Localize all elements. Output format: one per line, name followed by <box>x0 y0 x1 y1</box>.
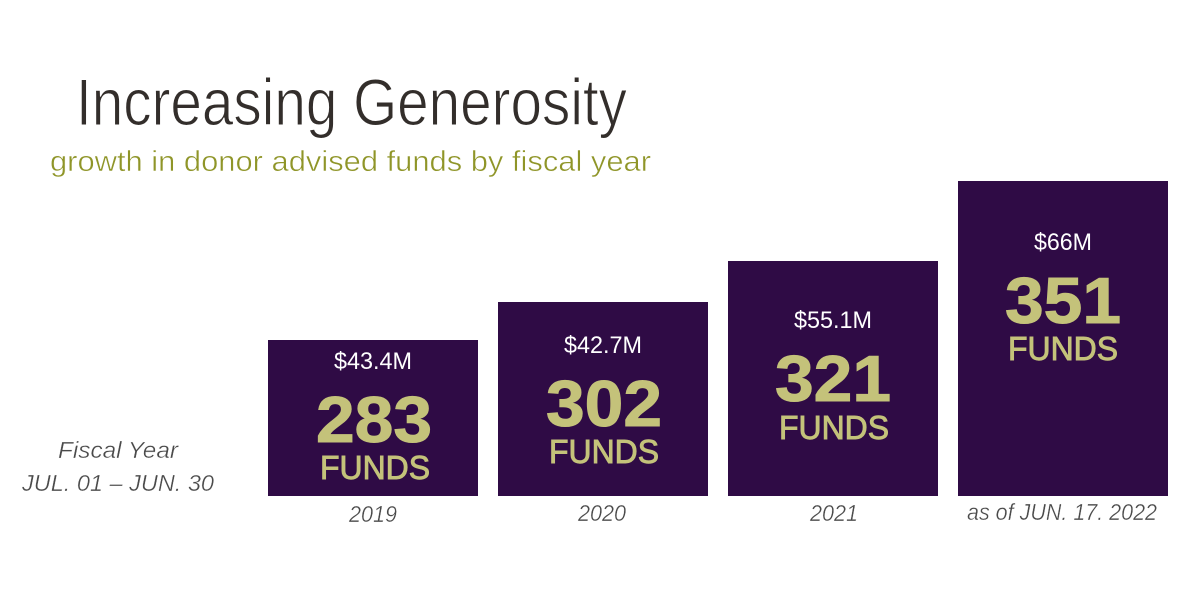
label: 2019: 2019 <box>348 501 397 527</box>
bar: 2019: 283 <box>316 383 432 456</box>
bar: 2021: FUNDS <box>779 409 889 446</box>
label: 2020: 2020 <box>577 500 626 526</box>
bar: 2020: 302 <box>546 367 662 440</box>
fiscal year note <box>21 437 214 496</box>
label: 2022: as of JUN. 17. 2022 <box>967 499 1157 525</box>
bar: 2020 <box>498 302 708 496</box>
bar: 2021: 321 <box>775 342 891 415</box>
fiscal year note: Fiscal Year <box>58 437 179 463</box>
fiscal year note: JUL. 01 – JUN. 30 <box>21 470 214 496</box>
bar: 2022 <box>958 181 1168 496</box>
title: Increasing Generosity <box>76 65 627 139</box>
bar: 2021: $55.1M <box>794 307 872 334</box>
bar: 2022: FUNDS <box>1008 330 1118 367</box>
label: 2021: 2021 <box>809 500 858 526</box>
bar: 2019: $43.4M <box>334 348 412 375</box>
bar: 2022: 351 <box>1005 264 1121 337</box>
bar: 2020: $42.7M <box>564 332 642 359</box>
bar: 2020: FUNDS <box>549 433 659 470</box>
bar: 2019 <box>268 340 478 496</box>
bar: 2021 <box>728 261 938 496</box>
bar: 2019: FUNDS <box>320 449 430 486</box>
subtitle: growth in donor advised funds by fiscal year <box>50 146 651 178</box>
bar: 2022: $66M <box>1034 229 1092 256</box>
